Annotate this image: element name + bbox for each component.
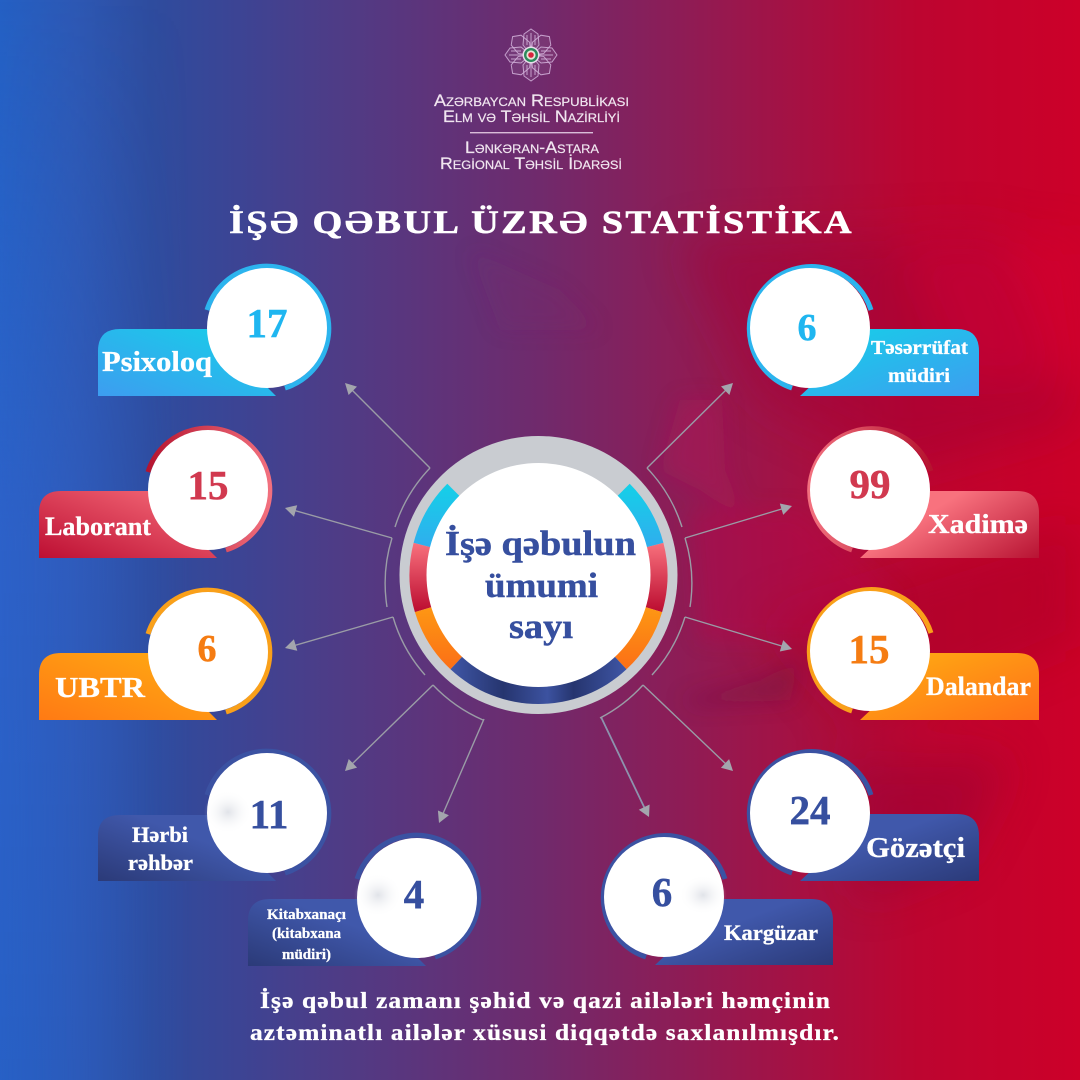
header: ministry name: Lənkəran-Astara: [465, 139, 599, 157]
card: Laborant 15: [39, 428, 270, 558]
card: Dalandar 15: 15: [848, 626, 890, 672]
card: Kitabxanaçı 4: 4: [404, 871, 424, 917]
logo emblem: [505, 29, 557, 81]
central hub: total hires: ümumi: [485, 566, 598, 605]
card: UBTR 6: 6: [198, 628, 216, 670]
card: Kitabxanaçı 4: Kitabxanaçı: [267, 907, 346, 923]
card: Kargüzar 6: 6: [652, 869, 672, 915]
card: Psixoloq 17: Psixoloq: [102, 347, 212, 378]
card: Xadimə 99: 99: [850, 461, 890, 507]
card: Təsərrüfat müdiri 6: [749, 267, 979, 396]
card: Kitabxanaçı 4: [248, 835, 479, 966]
card: Kargüzar 6: Kargüzar: [724, 920, 818, 945]
card: Hərbi rəhbər 11: rəhbər: [128, 850, 193, 875]
card: Dalandar 15: [809, 590, 1039, 720]
footer note: [250, 988, 840, 1045]
header: ministry name: [434, 92, 629, 173]
central hub: total hires: [400, 436, 678, 714]
card: UBTR 6: [39, 590, 270, 720]
card: Hərbi rəhbər 11: [98, 751, 329, 881]
card: Laborant 15: 15: [188, 462, 228, 508]
card: Kargüzar 6: [603, 836, 833, 965]
card: Kitabxanaçı 4: (kitabxana: [272, 926, 341, 942]
footer note: aztəminatlı ailələr xüsusi diqqətdə saxlanılmışdır.: [250, 1020, 840, 1045]
card: Gözətçi 24: 24: [790, 787, 830, 833]
card: Gözətçi 24: Gözətçi: [866, 833, 965, 864]
card: Təsərrüfat müdiri 6: 6: [798, 307, 816, 349]
footer note: İşə qəbul zamanı şəhid və qazi ailələri həmçinin: [260, 988, 831, 1013]
card: Psixoloq 17: 17: [246, 300, 288, 346]
central hub: total hires: İşə qəbulun: [445, 524, 636, 563]
card: Gözətçi 24: [749, 752, 979, 881]
card: Laborant 15: Laborant: [45, 512, 151, 541]
card: Xadimə 99: Xadimə: [928, 509, 1028, 539]
central hub: total hires: sayı: [509, 607, 573, 646]
card: UBTR 6: UBTR: [55, 672, 146, 704]
card: Psixoloq 17: [98, 266, 329, 396]
card: Xadimə 99: [810, 429, 1039, 558]
card: Dalandar 15: Dalandar: [926, 672, 1031, 701]
card: Hərbi rəhbər 11: 11: [250, 791, 288, 837]
card: Hərbi rəhbər 11: Hərbi: [132, 822, 188, 847]
arrows and connecting arcs: [285, 383, 792, 823]
title: İŞƏ QƏBUL ÜZRƏ STATİSTİKA: [229, 203, 854, 241]
header: ministry name: Azərbaycan Respublikası: [434, 92, 629, 110]
header: ministry name: Regional Təhsil İdarəsi: [440, 154, 622, 173]
card: Təsərrüfat müdiri 6: müdiri: [888, 365, 950, 387]
card: Təsərrüfat müdiri 6: Təsərrüfat: [871, 337, 968, 359]
header: ministry name: Elm və Təhsil Nazirliyi: [443, 108, 620, 126]
card: Kitabxanaçı 4: müdiri): [282, 947, 331, 963]
